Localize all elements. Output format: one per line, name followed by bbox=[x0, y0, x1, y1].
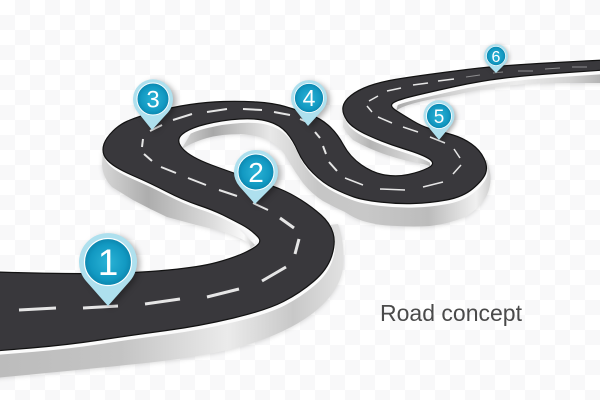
caption: Road concept bbox=[380, 300, 523, 326]
pin 3 bbox=[133, 79, 173, 130]
pin 2 bbox=[234, 150, 278, 204]
pin 1: 1 bbox=[98, 242, 118, 283]
pin 5 bbox=[424, 100, 454, 140]
wall: middle bend bbox=[181, 110, 491, 226]
pin 2: 2 bbox=[248, 157, 264, 188]
pin 6 bbox=[484, 44, 508, 73]
road walls bbox=[0, 66, 600, 378]
pin 3: 3 bbox=[146, 86, 160, 114]
wall: near curve bbox=[0, 224, 344, 378]
pin 5: 5 bbox=[434, 107, 444, 128]
pin 6: 6 bbox=[492, 49, 501, 66]
lane dashes bbox=[19, 67, 587, 310]
wall: left bend bbox=[102, 150, 255, 259]
pin 4: 4 bbox=[303, 85, 316, 111]
road surface bbox=[0, 60, 600, 351]
pin 4 bbox=[291, 80, 327, 126]
wall: upper bend bbox=[343, 105, 432, 170]
road white lip bbox=[0, 64, 600, 355]
wall: far stretch bbox=[396, 66, 600, 111]
pin 1 bbox=[79, 233, 137, 306]
